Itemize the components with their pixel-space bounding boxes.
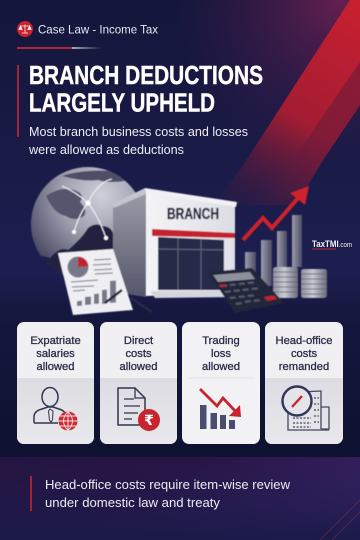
accent bar: title: [17, 65, 19, 137]
header rule: [17, 47, 102, 49]
accent bar: takeaway: [30, 476, 32, 511]
red awning: [152, 229, 235, 238]
card text: loss: [211, 348, 231, 360]
header tag: [17, 21, 159, 49]
panel: trading loss: [182, 322, 260, 444]
subtitle: were allowed as deductions: [28, 142, 184, 157]
icon: scales of justice: [17, 21, 33, 37]
card text: salaries: [36, 348, 75, 360]
coin stacks: [273, 267, 327, 298]
illustration: branch scene: [24, 167, 327, 318]
subtitle: [28, 124, 248, 157]
title: LARGELY UPHELD: [29, 88, 215, 118]
document with charts: [58, 249, 133, 315]
takeaway text: under domestic law and treaty: [45, 496, 221, 510]
panel: head-office costs: [265, 322, 343, 444]
card text: Expatriate: [30, 335, 81, 347]
panel: direct costs: [100, 322, 177, 444]
subtitle: Most branch business costs and losses: [29, 124, 248, 139]
diagonal red stripe: [214, 0, 360, 205]
icon: magnifier over buildings: [282, 386, 329, 430]
takeaway text: [45, 478, 291, 510]
card text: costs: [291, 348, 317, 360]
building: [112, 188, 237, 298]
bar chart: [245, 215, 302, 286]
footer band: [0, 457, 360, 540]
card text: allowed: [37, 361, 74, 373]
pen: [131, 298, 152, 312]
card text: Head-office: [275, 335, 333, 347]
icon: falling bars and arrow: [200, 389, 241, 429]
brand: TaxTMI.com: TaxTMI.com: [312, 239, 352, 249]
storefront windows: [158, 237, 224, 290]
card text: costs: [125, 348, 152, 360]
card text: allowed: [120, 361, 157, 373]
card text: [275, 335, 333, 373]
rising red arrow: [243, 186, 309, 240]
title: BRANCH DEDUCTIONS: [29, 60, 263, 90]
title: [29, 60, 263, 118]
card text: Trading: [202, 335, 240, 347]
card text: [120, 335, 157, 373]
card text: [30, 335, 81, 373]
calculator: [208, 268, 284, 313]
sign text: BRANCH: [167, 206, 219, 223]
card text: allowed: [202, 361, 240, 373]
icon: person with globe: [34, 388, 78, 430]
takeaway text: Head-office costs require item-wise review: [45, 478, 291, 492]
card text: Direct: [124, 335, 154, 347]
icon: globe with network: [30, 166, 136, 276]
icon: document with rupee: ₹: [144, 413, 154, 429]
panel: expatriate salaries: [17, 322, 94, 444]
card text: [202, 335, 240, 373]
category label: Case Law - Income Tax: [38, 22, 159, 36]
card text: remanded: [279, 361, 329, 373]
